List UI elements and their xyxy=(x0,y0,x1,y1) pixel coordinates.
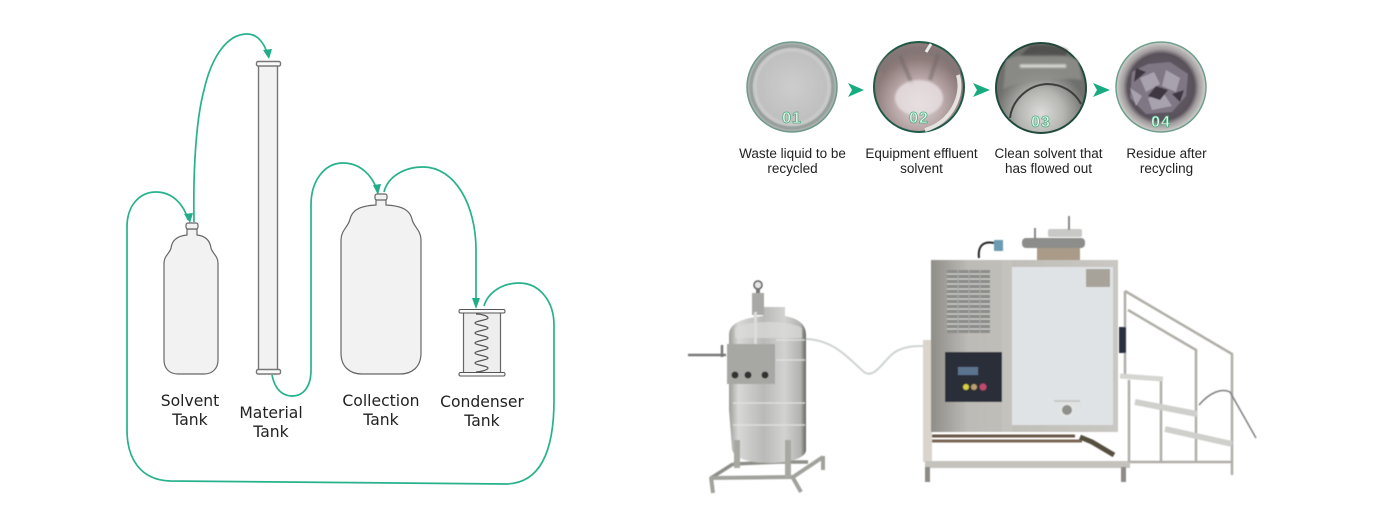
tank control panel xyxy=(727,344,775,384)
tank front frame xyxy=(710,440,823,493)
caption 02: Equipment effluent xyxy=(865,146,978,161)
flow arrowheads xyxy=(184,49,480,309)
caption 03: has flowed out xyxy=(1005,161,1092,176)
tank gauge assembly xyxy=(752,281,764,346)
pressure transmitter xyxy=(979,240,1003,258)
tank side pipe xyxy=(688,345,726,357)
cooling vent xyxy=(947,270,990,333)
label: condenser tank: Condenser xyxy=(440,393,524,411)
machine cabinet xyxy=(931,260,1118,432)
caption 02: solvent xyxy=(900,161,943,176)
process stages row xyxy=(739,42,1207,176)
stage 03: clean solvent photo xyxy=(996,43,1086,133)
top kettle lid xyxy=(1022,216,1085,260)
photo: distillation recovery machine xyxy=(923,216,1256,482)
material tank xyxy=(256,62,280,374)
line from material tank to collection tank xyxy=(272,163,377,396)
caption 03: Clean solvent that xyxy=(994,146,1103,161)
arrow 1 xyxy=(848,83,864,97)
return line from condenser to solvent tank xyxy=(127,192,554,484)
side hose xyxy=(1199,391,1256,438)
label: material tank: Tank xyxy=(252,423,289,441)
solvent tank xyxy=(164,223,218,374)
lower piping xyxy=(932,436,1114,455)
collection tank xyxy=(341,194,421,374)
discharge valve xyxy=(1054,400,1080,416)
arrow 2 xyxy=(973,83,990,97)
process flow diagram xyxy=(127,34,554,484)
stage 03: clean solvent photo: 03 xyxy=(1031,114,1051,131)
label: collection tank: Collection xyxy=(342,392,420,410)
side gauge and bottle xyxy=(1119,327,1126,353)
line from collection tank to condenser tank xyxy=(384,167,476,303)
caption 04: recycling xyxy=(1140,161,1193,176)
tank body xyxy=(729,307,806,463)
stage 04: residue photo: 04 xyxy=(1151,114,1171,131)
label: solvent tank: Solvent xyxy=(161,392,219,410)
machine base frame xyxy=(923,340,1130,482)
access stairs xyxy=(1120,291,1232,475)
label: material tank: Material xyxy=(239,404,303,422)
photo: stainless receiving tank xyxy=(688,281,925,493)
condenser tank xyxy=(459,310,505,376)
caption 01: recycled xyxy=(767,161,818,176)
caption 01: Waste liquid to be xyxy=(739,146,846,161)
tank rear frame xyxy=(711,462,808,478)
label: solvent tank: Tank xyxy=(171,411,208,429)
tank seams xyxy=(733,340,805,425)
stage 01: waste liquid photo: 01 xyxy=(782,110,802,127)
stage 02: equipment effluent photo: 02 xyxy=(909,110,929,127)
control panel xyxy=(945,352,1002,402)
tank top highlight xyxy=(735,322,802,338)
stage 01: waste liquid photo xyxy=(747,42,837,132)
stage 04: residue photo xyxy=(1116,42,1206,132)
flow lines xyxy=(127,34,554,484)
line from solvent tank to material tank xyxy=(194,34,268,222)
connecting hose xyxy=(806,339,925,374)
label: condenser tank: Tank xyxy=(463,412,500,430)
white door panel xyxy=(1012,267,1113,425)
label: collection tank: Tank xyxy=(362,411,399,429)
arrow 3 xyxy=(1093,83,1110,97)
name plate xyxy=(1086,269,1110,287)
stage 02: equipment effluent photo xyxy=(874,42,964,132)
caption 04: Residue after xyxy=(1126,146,1207,161)
